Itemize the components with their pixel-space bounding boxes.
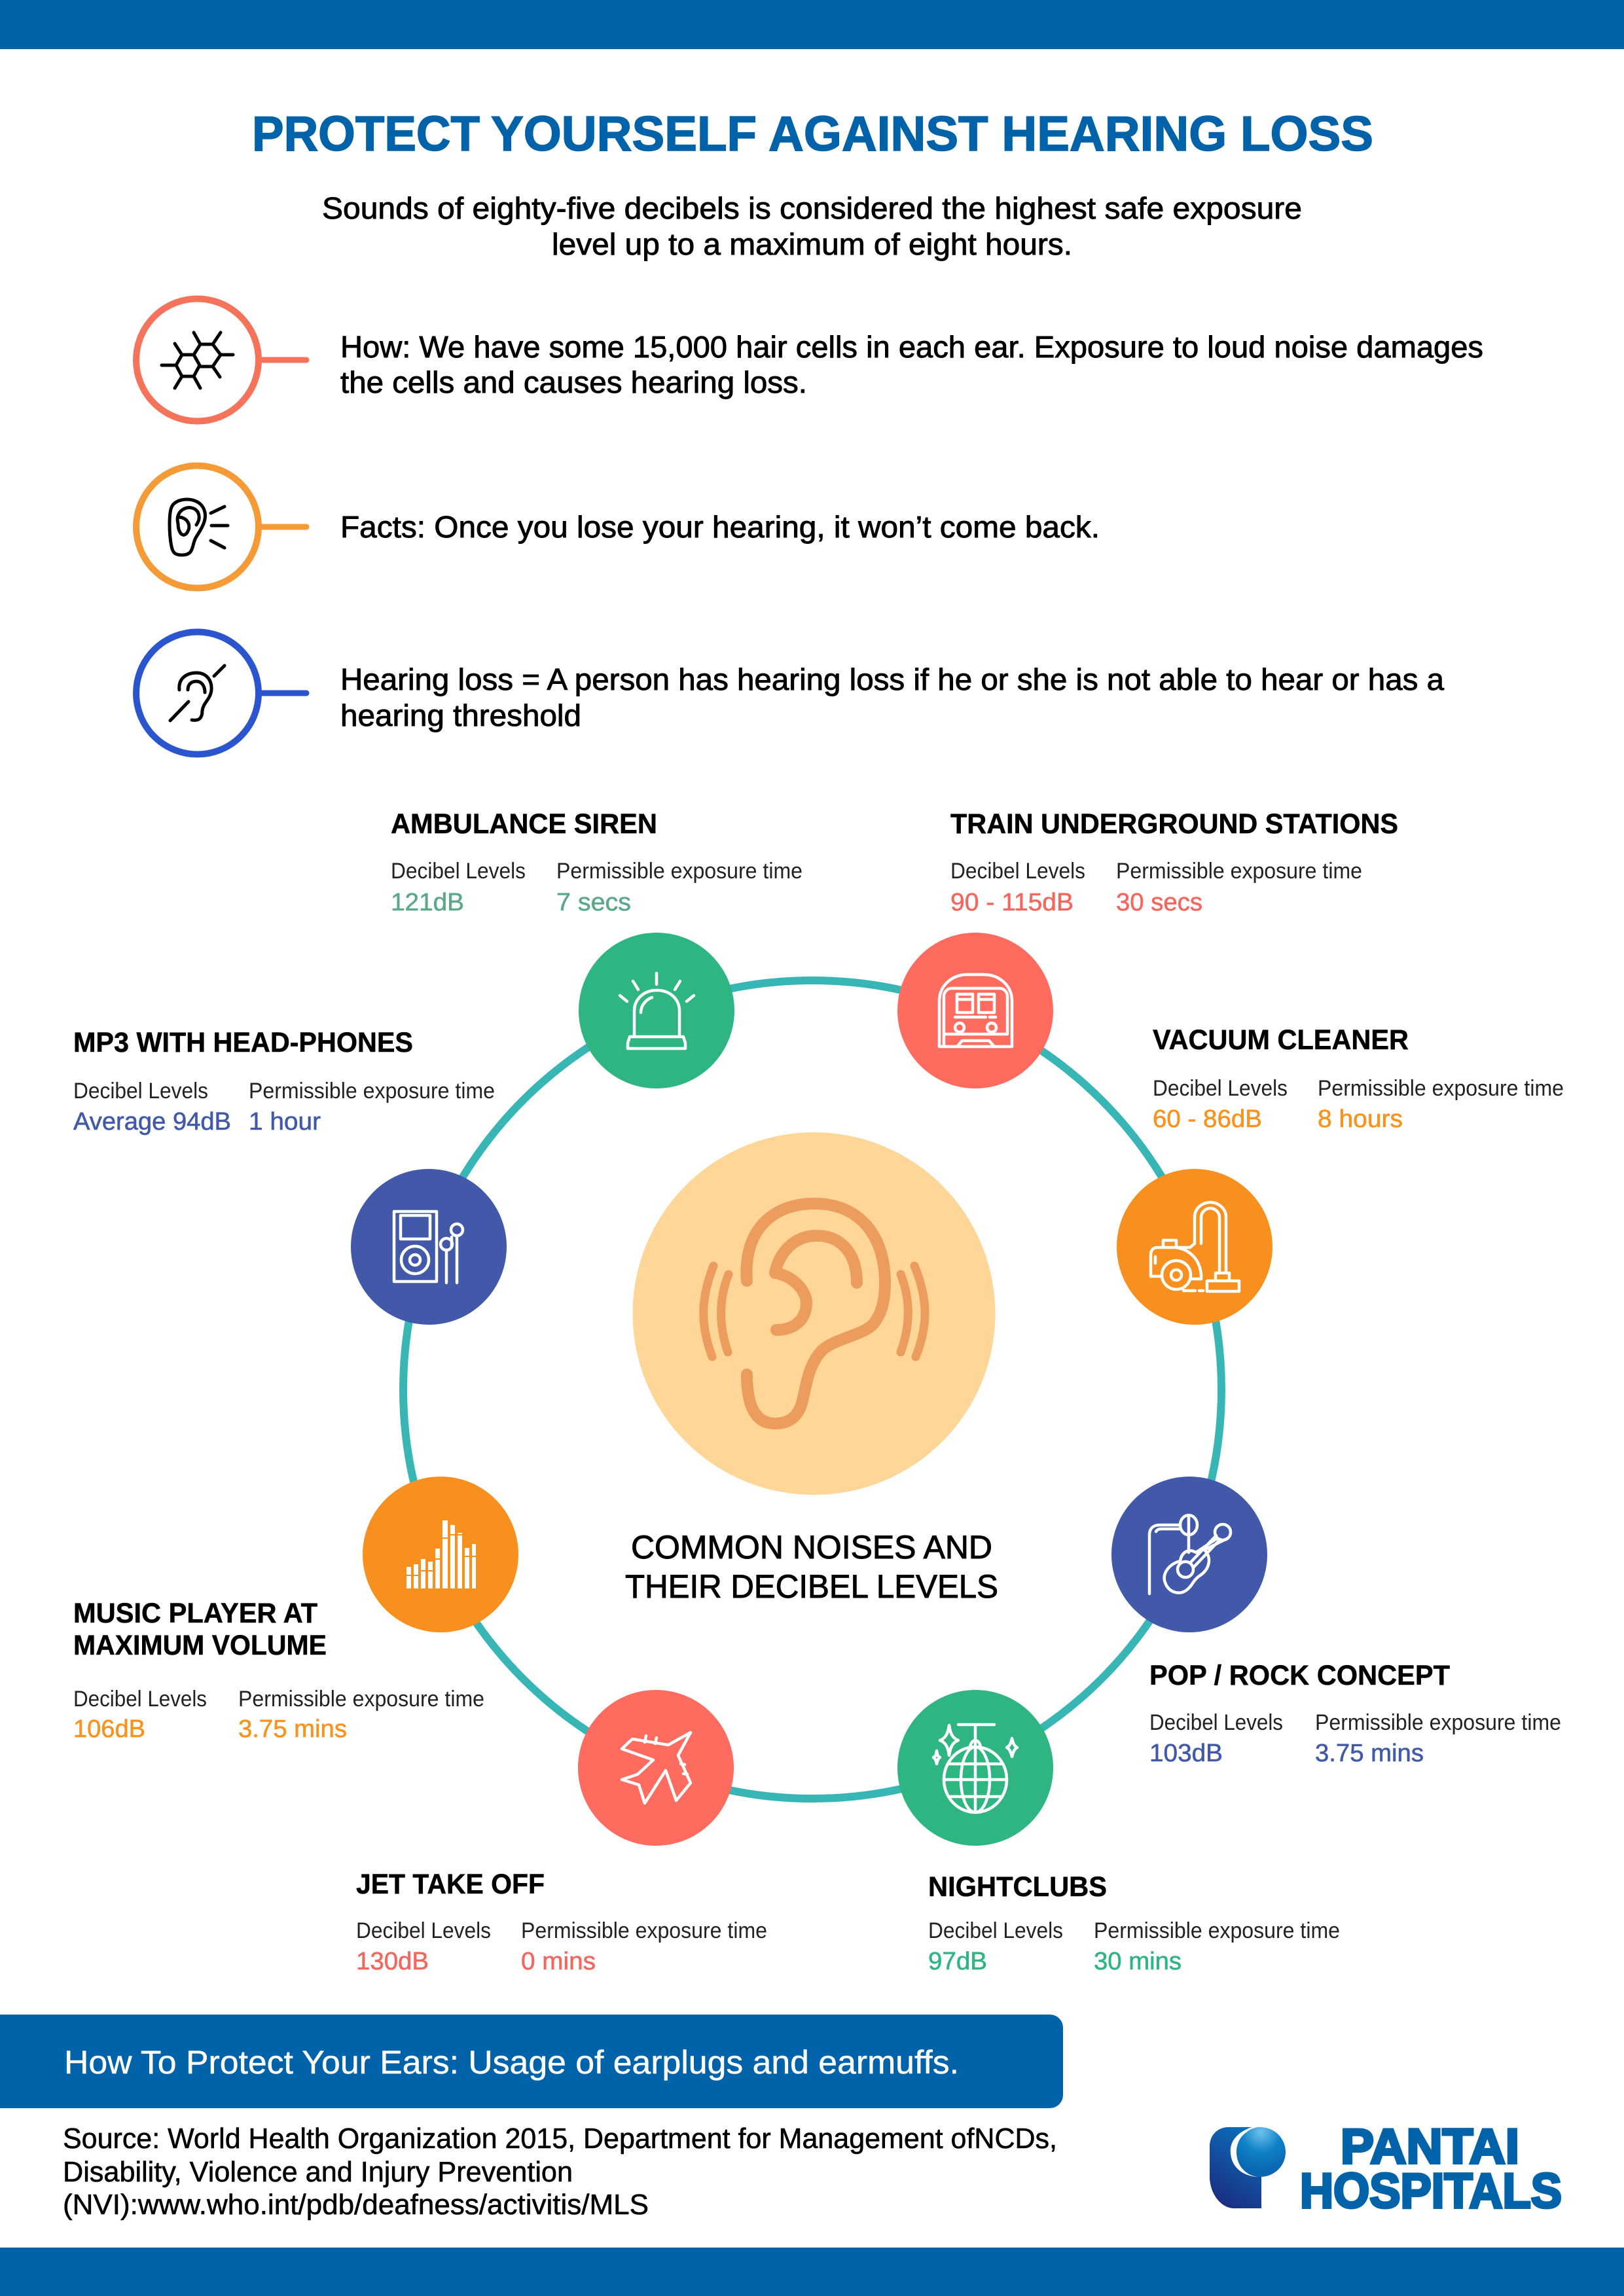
top bar — [0, 0, 1624, 49]
label: jet take off: JET TAKE OFF — [356, 1869, 545, 1900]
label: mp3 with head-phones: Average 94dB — [73, 1108, 231, 1136]
protection banner — [0, 2015, 1063, 2108]
text: hearing loss: Hearing loss = A person has hearing loss if he or she is not able to hear or has a — [340, 662, 1444, 696]
label: nightclubs: Permissible exposure time — [1094, 1918, 1340, 1943]
label: nightclubs: NIGHTCLUBS — [928, 1871, 1107, 1903]
title: PROTECT — [252, 106, 480, 161]
label: pop rock concert: 3.75 mins — [1315, 1740, 1424, 1767]
logo wordmark: HOSPITALS — [1300, 2163, 1562, 2218]
icon: siren — [579, 933, 734, 1088]
label: mp3 with head-phones: Permissible exposure time — [249, 1079, 495, 1103]
label: nightclubs — [928, 1871, 1340, 1975]
source text: (NVI):www.who.int/pdb/deafness/activitis/MLS — [63, 2189, 649, 2221]
label: jet take off: 130dB — [356, 1948, 429, 1975]
label: jet take off: Decibel Levels — [356, 1918, 491, 1943]
bottom bar — [0, 2248, 1624, 2296]
source text: Source: World Health Organization 2015, Department for Management ofNCDs, — [63, 2123, 1057, 2155]
label: pop rock concert: 103dB — [1149, 1740, 1223, 1767]
intro text: Sounds of eighty-five decibels is considered the highest safe exposure — [322, 191, 1302, 225]
center heading: THEIR DECIBEL LEVELS — [625, 1568, 998, 1605]
label: ambulance siren: 7 secs — [556, 889, 631, 916]
protection banner: How To Protect Your Ears: Usage of earplugs and earmuffs. — [64, 2044, 959, 2081]
label: pop rock concert: Decibel Levels — [1149, 1710, 1283, 1735]
icon: mp3 player — [351, 1169, 507, 1325]
text: hearing loss: hearing threshold — [340, 698, 581, 732]
label: music player at maximum volume: Decibel Levels — [73, 1687, 207, 1712]
label: mp3 with head-phones — [73, 1027, 495, 1136]
ring — [403, 980, 1221, 1799]
center heading: COMMON NOISES AND — [631, 1529, 992, 1566]
label: ambulance siren: Decibel Levels — [391, 859, 526, 884]
label: pop rock concert: Permissible exposure time — [1315, 1710, 1561, 1735]
label: jet take off: Permissible exposure time — [521, 1918, 767, 1943]
label: vacuum cleaner: Permissible exposure time — [1318, 1076, 1564, 1101]
label: nightclubs: Decibel Levels — [928, 1918, 1063, 1943]
label: ambulance siren — [391, 808, 803, 916]
row: hearing loss — [136, 632, 1444, 754]
label: train underground stations: Decibel Levels — [950, 859, 1085, 884]
text: facts: Facts: Once you lose your hearing, it won’t come back. — [340, 510, 1100, 544]
label: mp3 with head-phones: Decibel Levels — [73, 1079, 208, 1103]
icon: hearing impaired ear — [136, 632, 306, 754]
title: YOURSELF AGAINST HEARING LOSS — [491, 106, 1373, 161]
label: vacuum cleaner — [1153, 1024, 1564, 1133]
text: hearing loss — [340, 662, 1444, 732]
label: train underground stations: 30 secs — [1116, 889, 1202, 916]
source text — [63, 2123, 1057, 2221]
icon: airplane — [578, 1690, 734, 1846]
label: train underground stations: TRAIN UNDERGROUND STATIONS — [950, 808, 1398, 840]
label: music player at maximum volume: Permissible exposure time — [238, 1687, 484, 1712]
label: vacuum cleaner: 8 hours — [1318, 1105, 1403, 1133]
center ear illustration — [632, 1132, 995, 1495]
icon: music bars — [363, 1477, 518, 1632]
icon: guitar and mic — [1111, 1477, 1267, 1632]
label: music player at maximum volume: 3.75 mins — [238, 1715, 347, 1743]
logo: pantai hospitals — [1210, 2119, 1562, 2218]
label: music player at maximum volume: MAXIMUM VOLUME — [73, 1630, 327, 1661]
logo mark — [1210, 2127, 1286, 2208]
label: music player at maximum volume: 106dB — [73, 1715, 145, 1743]
icon: hair cells — [136, 298, 306, 422]
label: ambulance siren: Permissible exposure time — [556, 859, 803, 884]
label: pop rock concert — [1149, 1660, 1561, 1767]
label: mp3 with head-phones: MP3 WITH HEAD-PHONES — [73, 1027, 413, 1058]
label: vacuum cleaner: 60 - 86dB — [1153, 1105, 1262, 1133]
label: ambulance siren: AMBULANCE SIREN — [391, 808, 657, 840]
label: nightclubs: 97dB — [928, 1948, 987, 1975]
text: how — [340, 330, 1483, 399]
label: vacuum cleaner: Decibel Levels — [1153, 1076, 1288, 1101]
label: pop rock concert: POP / ROCK CONCEPT — [1149, 1660, 1450, 1691]
text: how: How: We have some 15,000 hair cells in each ear. Exposure to loud noise damages — [340, 330, 1483, 364]
label: ambulance siren: 121dB — [391, 889, 464, 916]
logo wordmark — [1300, 2119, 1562, 2218]
center heading — [625, 1529, 998, 1605]
label: train underground stations — [950, 808, 1398, 916]
label: train underground stations: Permissible exposure time — [1116, 859, 1362, 884]
label: jet take off: 0 mins — [521, 1948, 596, 1975]
icon: ear with sound — [136, 466, 306, 588]
text: how: the cells and causes hearing loss. — [340, 365, 807, 399]
icon: train — [897, 933, 1053, 1088]
label: mp3 with head-phones: 1 hour — [249, 1108, 321, 1136]
row: facts — [136, 466, 1100, 588]
icon: disco ball — [897, 1690, 1053, 1846]
source text: Disability, Violence and Injury Prevention — [63, 2156, 573, 2188]
label: vacuum cleaner: VACUUM CLEANER — [1153, 1024, 1409, 1056]
intro text: level up to a maximum of eight hours. — [552, 227, 1072, 261]
label: music player at maximum volume: MUSIC PLAYER AT — [73, 1598, 317, 1629]
row: how — [136, 298, 1483, 422]
label: train underground stations: 90 - 115dB — [950, 889, 1074, 916]
label: jet take off — [356, 1869, 767, 1975]
logo wordmark: PANTAI — [1341, 2119, 1519, 2174]
label: music player at maximum volume — [73, 1598, 484, 1743]
intro text — [322, 191, 1302, 261]
icon: vacuum cleaner — [1117, 1169, 1272, 1325]
label: nightclubs: 30 mins — [1094, 1948, 1182, 1975]
